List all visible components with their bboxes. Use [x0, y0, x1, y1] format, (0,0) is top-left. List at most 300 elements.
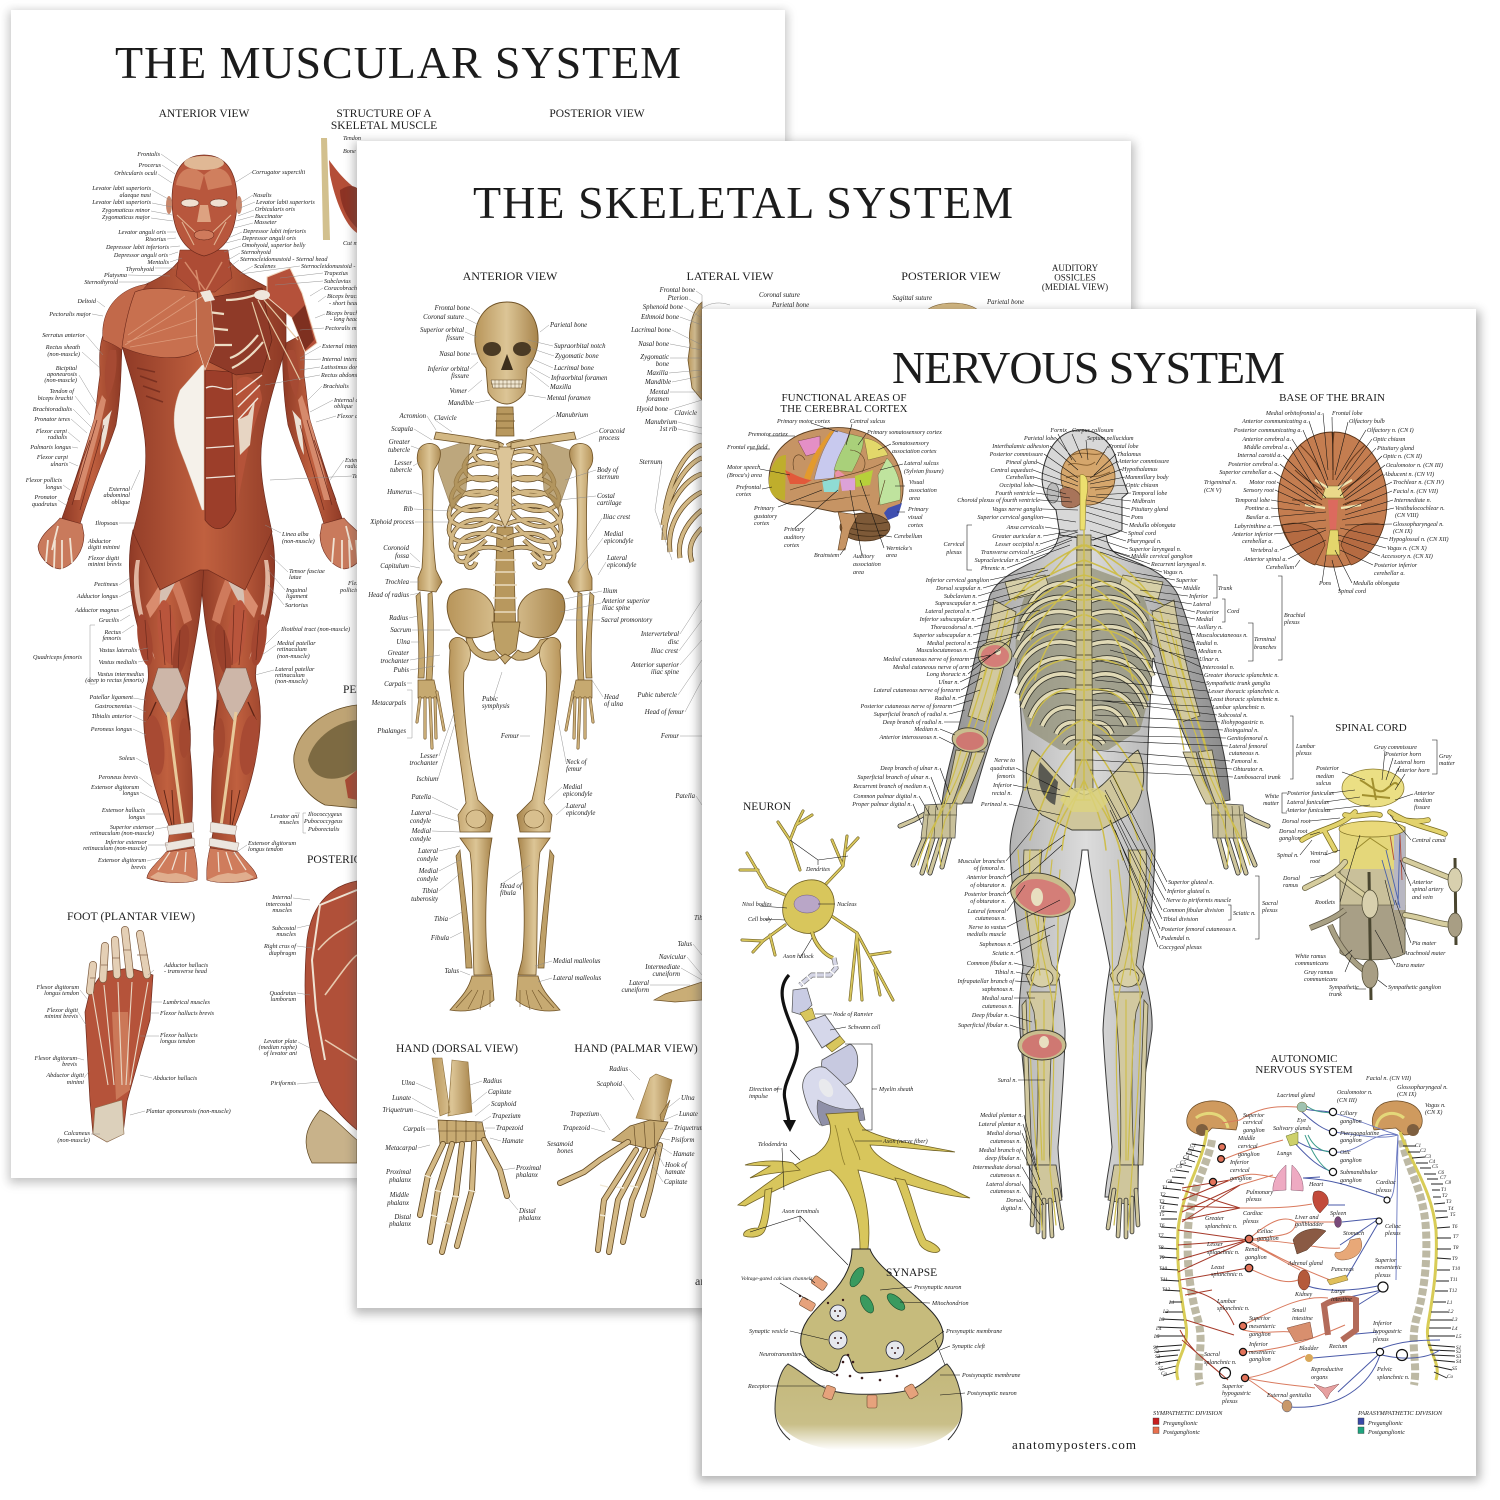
labels: autonomic: Pulmonary — [1245, 1190, 1273, 1196]
organ: pancreas — [1327, 1275, 1348, 1285]
heading: hand dorsal: HAND (DORSAL VIEW) — [396, 1043, 518, 1055]
labels: nervous body right: Inferior — [1188, 593, 1209, 600]
labels: nervous body right: plexus — [1283, 620, 1300, 626]
labels: muscular right: Flexor hallucis brevis — [159, 1010, 215, 1017]
labels: muscular right: Masseter — [253, 219, 277, 226]
leader lines: nervous body — [913, 434, 1233, 1225]
labels: brain diagrams: Internal carotid a. — [1236, 453, 1282, 459]
labels: brain diagrams: Trochlear n. (CN IV) — [1393, 479, 1444, 486]
labels: spinal cord: spinal artery — [1412, 887, 1444, 893]
labels: autonomic: Facial n. (CN VII) — [1365, 1075, 1411, 1082]
labels: skeletal: Radius — [388, 615, 408, 622]
labels: skeletal: cuneiform — [652, 971, 680, 978]
labels: nervous body left: Hypothalamus — [1121, 467, 1158, 473]
labels: skeletal: Lesser — [393, 460, 412, 467]
spine level labels: C7 — [1170, 1168, 1176, 1174]
labels: skeletal: Head of femur — [644, 709, 684, 716]
labels: brain diagrams: Spinal cord — [1338, 589, 1367, 595]
labels: muscular left: Extensor digitorum — [90, 784, 140, 791]
labels: neuron: Receptor — [747, 1384, 771, 1390]
labels: skeletal: Costal — [597, 493, 615, 500]
labels: skeletal: condyle — [417, 856, 438, 863]
labels: muscular left: muscles — [279, 819, 300, 826]
labels: nervous body left: Infrapatellar branch of — [956, 978, 1015, 985]
curved arrow: direction of impulse — [782, 975, 797, 1132]
labels: autonomic: Bladder — [1299, 1346, 1319, 1352]
labels: spinal cord: Posterior horn — [1384, 752, 1421, 758]
labels: skeletal: Lacrimal bone — [553, 365, 594, 372]
labels: autonomic: splanchnic n. — [1205, 1224, 1238, 1230]
labels: autonomic: mesenteric — [1249, 1324, 1276, 1330]
labels: skeletal: Medial malleolus — [552, 958, 601, 965]
labels: muscular left: Flexor carpi — [36, 454, 68, 461]
labels: nervous body left: Superficial branch of ulnar n. — [857, 774, 930, 781]
labels: skeletal: Humerus — [386, 489, 412, 496]
labels: skeletal: Rib — [403, 506, 414, 513]
labels: spinal cord: Anterior funiculus — [1285, 807, 1331, 814]
labels: autonomic: Superior — [1243, 1113, 1265, 1119]
spine level labels: T2 — [1160, 1192, 1166, 1198]
labels: brain diagrams: Pituitary gland — [1376, 446, 1415, 452]
labels: autonomic: ganglion — [1249, 1332, 1271, 1338]
website: skeletal clipped: anatomyposters.com — [695, 1274, 795, 1288]
labels: muscular left: Soleus — [119, 755, 136, 762]
brackets: nervous — [967, 525, 1293, 939]
spine level labels: T12 — [1162, 1287, 1170, 1293]
labels: skeletal: epicondyle — [607, 562, 636, 569]
labels: nervous body left — [851, 428, 1176, 1212]
illustration: posterior abdominal wall — [305, 881, 357, 1163]
labels: muscular right: Linea alba — [281, 531, 309, 538]
labels: neuron: Direction of — [748, 1086, 780, 1093]
labels: nervous body left: Temporal lobe — [1132, 491, 1167, 497]
labels: nervous body left: Thalamus — [1117, 452, 1142, 458]
labels: spinal cord: Lateral horn — [1393, 760, 1425, 766]
labels: brain diagrams: (Broca's) area — [727, 472, 762, 479]
labels: muscular left: Subcostal — [272, 925, 296, 932]
labels: brain diagrams: Primary motor cortex — [776, 419, 830, 425]
sternum — [495, 447, 515, 528]
labels: nervous body left: Superficial branch of radial n. — [874, 711, 948, 718]
labels: nervous body left: Fornix — [1049, 428, 1067, 434]
labels: skeletal: of ulna — [604, 701, 624, 708]
labels: skeletal: Carpals — [403, 1126, 425, 1133]
labels: brain diagrams: cortex — [908, 523, 924, 529]
right arm bones — [566, 443, 594, 748]
labels: muscular right: oblique — [334, 403, 353, 410]
labels: skeletal: bone — [656, 361, 669, 368]
labels: nervous body right: plexus — [1261, 908, 1278, 914]
spine level labels: C7 — [1440, 1175, 1446, 1181]
labels: nervous body right: Lumbar splanchnic n. — [1211, 705, 1265, 711]
labels: muscular right: Depressor labii inferioris — [242, 228, 307, 235]
labels: skeletal: Pterion — [667, 295, 689, 302]
labels: muscular right: Scalenes — [254, 263, 276, 270]
labels: skeletal: fissure — [446, 335, 464, 342]
labels: autonomic: Cardiac — [1243, 1211, 1263, 1217]
spine level labels: S1 — [1153, 1345, 1159, 1351]
labels: autonomic: Lesser — [1206, 1242, 1224, 1248]
spine level labels: T6 — [1452, 1224, 1458, 1230]
labels: autonomic: splanchnic n. — [1217, 1306, 1250, 1312]
heading: auditory ossicles: AUDITORY — [1052, 263, 1098, 273]
labels: skeletal: Lateral — [417, 848, 438, 855]
labels: nervous body right: Ilioinguinal n. — [1223, 728, 1259, 734]
labels: nervous body left: cutaneous n. — [982, 1004, 1013, 1010]
labels: autonomic: Pancreas — [1330, 1267, 1354, 1273]
labels: autonomic: Submandibular — [1340, 1170, 1378, 1176]
labels: muscular right: Sartorius — [285, 602, 309, 609]
labels: muscular right: (non-muscle) — [277, 653, 310, 660]
labels: muscular left: intercostal — [266, 901, 292, 908]
labels: muscular right: Biceps brachii — [326, 310, 362, 317]
labels: skeletal: Lunate — [391, 1095, 411, 1102]
labels: nervous body left: Nerve to vastus — [967, 925, 1007, 931]
labels: neuron: impulse — [749, 1094, 768, 1100]
labels: skeletal: Ulna — [396, 639, 411, 646]
ear — [1047, 483, 1059, 503]
labels: skeletal: Parietal bone — [549, 322, 587, 329]
labels: nervous body left: Inferior subscapular n. — [919, 616, 976, 623]
labels: brain diagrams: Oculomotor n. (CN III) — [1386, 462, 1443, 469]
labels: skeletal: Vomer — [450, 388, 467, 395]
labels: skeletal: symphysis — [482, 703, 510, 710]
left arm bones — [416, 443, 444, 748]
labels: skeletal: Head — [603, 694, 619, 701]
labels: spinal cord: Central canal — [1412, 838, 1446, 844]
labels: muscular right: Tensor fasciae — [289, 568, 325, 575]
labels: skeletal: Coronoid — [383, 545, 410, 552]
organ: kidney — [1298, 1270, 1310, 1290]
labels: brain diagrams: Wernicke's — [886, 546, 913, 552]
labels: skeletal: Ischium — [415, 776, 438, 783]
labels: brain diagrams: Posterior cerebral a. — [1227, 462, 1279, 468]
illustration: functional areas brain — [769, 428, 903, 550]
legend: parasympathetic division: Postganglionic — [1367, 1430, 1405, 1436]
labels: nervous body left: Septum pellucidum — [1087, 436, 1134, 442]
labels: skeletal: Navicular — [658, 954, 686, 961]
labels: skeletal: femur — [566, 766, 582, 773]
labels: nervous body right: Posterior femoral cutaneous n. — [1160, 926, 1237, 933]
labels: skeletal: Mental — [649, 389, 669, 396]
organ: reproductive — [1314, 1384, 1339, 1399]
labels: nervous body left: Medial pectoral n. — [926, 641, 972, 647]
labels: autonomic: cervical — [1243, 1120, 1263, 1126]
labels: skeletal: Medial — [603, 531, 623, 538]
labels: autonomic: Superior — [1249, 1316, 1271, 1322]
labels: muscular left: Risorius — [144, 236, 167, 243]
website: anatomyposters.com: anatomyposters.com — [1012, 1437, 1136, 1452]
labels: nervous body right: Coccygeal plexus — [1159, 945, 1202, 951]
labels: nervous body right: Obturator n. — [1233, 767, 1264, 773]
spine level labels: S5 — [1452, 1366, 1458, 1372]
labels: nervous body left: Dorsal — [1005, 1198, 1023, 1204]
spine level labels: C3 — [1186, 1151, 1192, 1157]
labels: muscular left: Depressor anguli oris — [113, 252, 169, 259]
forearm cut section — [951, 726, 989, 754]
labels: nervous body left: cutaneous n. — [990, 1189, 1021, 1195]
labels: autonomic: splanchnic n. — [1377, 1375, 1410, 1381]
labels: brain diagrams: Labyrinthine a. — [1233, 524, 1272, 530]
labels: brain diagrams: Anterior communicating a. — [1241, 419, 1308, 425]
labels: brain diagrams: Brainstem — [814, 553, 840, 559]
labels: neuron: Presynaptic neuron — [913, 1285, 961, 1291]
labels: skeletal: cuneiform — [621, 987, 649, 994]
labels: nervous body left: of femoral n. — [974, 865, 1005, 872]
labels: nervous body left: Sural n. — [998, 1078, 1017, 1084]
heading: synapse: SYNAPSE — [886, 1267, 937, 1279]
labels: brain diagrams: cerebellar a. — [1242, 539, 1273, 545]
labels: muscular left: Gracilis — [99, 617, 120, 624]
labels: skeletal: Lateral — [565, 803, 586, 810]
labels: skeletal: Iliac crest — [650, 648, 679, 655]
labels: muscular left: Deltoid — [76, 298, 97, 305]
leader lines: skeletal — [407, 291, 702, 1210]
legend: parasympathetic division — [1357, 1410, 1443, 1436]
labels: muscular right: Plantar aponeurosis (non-muscle) — [145, 1108, 231, 1115]
labels: skeletal: Iliac crest — [602, 514, 631, 521]
labels: autonomic: Sacral — [1204, 1352, 1220, 1358]
labels: nervous body left: of obturator n. — [970, 882, 1006, 889]
heading: posterior view: POSTERIOR VIEW — [549, 108, 645, 120]
labels: skeletal: disc — [668, 639, 679, 646]
labels: brain diagrams: Central sulcus — [850, 419, 886, 425]
labels: muscular left: Iliopsoas — [94, 520, 119, 527]
labels: muscular left: biceps brachii — [38, 395, 73, 402]
labels: brain diagrams: Premotor cortex — [747, 432, 788, 438]
labels: muscular left: Flexor digitorum — [34, 1055, 78, 1062]
labels: muscular left: Levator labii superioris — [91, 199, 152, 206]
labels: skeletal: cartilage — [597, 500, 622, 507]
spine level labels: L1 — [1446, 1300, 1453, 1306]
labels: muscular left: Palmaris longus — [29, 444, 72, 451]
labels: skeletal: condyle — [410, 818, 431, 825]
illustration: autonomic spines — [1155, 1101, 1455, 1385]
labels: muscular left: External — [108, 486, 130, 493]
labels: skeletal: Supraorbital notch — [554, 343, 606, 350]
labels: skeletal: Carpals — [384, 681, 406, 688]
labels: muscular right: Extensor digitorum — [247, 840, 296, 847]
labels: muscular right: Tendon of — [352, 473, 378, 480]
labels: nervous body left: Pineal gland — [1005, 460, 1038, 466]
spine level labels: L1 — [1168, 1300, 1175, 1306]
labels: nervous body left: Medial plantar n. — [979, 1113, 1023, 1119]
upper arm cut section — [978, 641, 1012, 669]
labels: nervous body right: branches — [1254, 645, 1277, 651]
labels: autonomic: plexus — [1242, 1219, 1259, 1225]
labels: nervous body left: Pons — [1130, 515, 1144, 521]
labels: autonomic: plexus — [1372, 1337, 1389, 1343]
labels: skeletal: Fibula — [430, 935, 450, 942]
spine level labels: C2 — [1420, 1148, 1426, 1154]
organ: bladder — [1305, 1354, 1313, 1362]
labels: brain diagrams: Pontine a. — [1244, 506, 1270, 512]
labels: brain diagrams: cortex — [736, 492, 752, 498]
labels: nervous body left: Inferior — [992, 782, 1013, 789]
labels: muscular left: Pectineus — [93, 581, 119, 588]
labels: skeletal: Patella — [410, 794, 432, 801]
labels: spinal cord: Rootlets — [1314, 900, 1336, 906]
labels: skeletal: Manubrium — [555, 412, 588, 419]
labels: neuron: Dendrites — [805, 867, 831, 873]
labels: skeletal — [367, 287, 1024, 1228]
labels: muscular left: abdominal — [104, 492, 130, 499]
organ: eye — [1297, 1102, 1307, 1112]
spine level labels: T8 — [1453, 1245, 1459, 1251]
labels: nervous body right: Lateral femoral — [1228, 743, 1268, 750]
labels: muscular right: Biceps brachii — [327, 293, 363, 300]
labels: skeletal: fibula — [500, 890, 516, 897]
right leg — [1108, 850, 1152, 1237]
labels: muscular right: longus tendon — [160, 1038, 195, 1045]
illustration: hand palmar view — [560, 1074, 672, 1252]
left leg bones — [449, 637, 494, 1011]
panel: muscular system poster — [9, 10, 787, 1183]
labels: nervous body left: of obturator n. — [970, 898, 1006, 905]
organ: stomach — [1335, 1238, 1362, 1260]
labels: autonomic: cervical — [1230, 1168, 1250, 1174]
spine level labels: C3 — [1425, 1154, 1431, 1160]
labels: autonomic: plexus — [1375, 1188, 1392, 1194]
heading: hand palmar: HAND (PALMAR VIEW) — [574, 1043, 698, 1055]
labels: brain diagrams: Temporal lobe — [1235, 498, 1270, 504]
labels: autonomic: splanchnic n. — [1211, 1272, 1244, 1278]
panel: nervous system poster — [698, 309, 1480, 1481]
spine level labels: T3 — [1159, 1199, 1165, 1205]
labels: neuron: Schwann cell — [848, 1025, 881, 1031]
labels: skeletal: epicondyle — [604, 538, 633, 545]
labels: muscular right: Buccinator — [255, 213, 283, 220]
labels: spinal cord: ganglion — [1279, 836, 1301, 842]
labels: nervous body left: Common palmar digital n. — [853, 794, 918, 800]
legend: sympathetic division: SYMPATHETIC DIVISION — [1153, 1410, 1223, 1417]
heading: functional areas: FUNCTIONAL AREAS OF — [782, 392, 906, 404]
spine level labels: S3 — [1155, 1354, 1161, 1360]
heading: pelvis clipped: PELVIC — [343, 684, 383, 696]
spine level labels: T5 — [1159, 1212, 1165, 1218]
labels: nervous body left: Greater auricular n. — [992, 534, 1042, 540]
heading: anterior view: ANTERIOR VIEW — [463, 269, 558, 283]
labels: muscular right: External intercostal — [321, 343, 371, 350]
illustration: lateral skeleton partial — [654, 295, 980, 1002]
labels: brain diagrams: cortex — [784, 543, 800, 549]
labels: muscular left: Zygomaticus minor — [102, 207, 151, 214]
labels: skeletal: trochanter — [381, 658, 409, 665]
labels: nervous body left: Phrenic n. — [980, 566, 1006, 572]
labels: skeletal: Lesser — [419, 753, 438, 760]
right leg bones — [516, 637, 561, 1011]
labels: spinal cord — [1263, 745, 1456, 998]
illustration: hand dorsal view — [420, 1058, 507, 1252]
labels: nervous body right — [1126, 539, 1316, 951]
labels: nervous body left: Transverse cervical n. — [981, 550, 1035, 556]
labels: skeletal: Radius — [608, 1066, 628, 1073]
title: skeletal: THE SKELETAL SYSTEM — [473, 177, 1013, 228]
labels: skeletal: Maxilla — [646, 370, 669, 377]
labels: muscular left: Rectus — [104, 629, 122, 636]
labels: muscular left: quadratus — [32, 501, 58, 508]
labels: muscular left: Pronator teres — [33, 416, 71, 423]
illustration: axon terminals — [738, 1112, 970, 1252]
labels: skeletal: Ulna — [401, 1080, 416, 1087]
head — [172, 155, 237, 256]
labels: skeletal: Neck of — [565, 759, 588, 766]
labels: skeletal: Radius — [482, 1078, 502, 1085]
labels: nervous body left: Medulla oblongata — [1128, 523, 1176, 529]
spine level labels: S2 — [1456, 1349, 1462, 1355]
heading: posterior view: POSTERIOR VIEW — [901, 269, 1001, 283]
reflected pectoral flap — [267, 268, 317, 352]
labels: brain diagrams: Vestibulocochlear n. — [1395, 506, 1445, 512]
labels: skeletal: phalanx — [388, 1177, 411, 1184]
labels: spinal cord: Pia mater — [1411, 941, 1437, 947]
labels: muscular left: Flexor pollicis — [25, 477, 63, 484]
labels: brain diagrams: Abducent n. (CN VI) — [1383, 471, 1434, 478]
labels: muscular right: Subclavius — [324, 278, 351, 285]
labels: skeletal: Talus — [678, 941, 692, 948]
labels: nervous body right: Lesser thoracic splanchnic n. — [1207, 689, 1280, 695]
organ: heart — [1313, 1191, 1328, 1213]
labels: muscular left: Abductor digiti — [45, 1072, 84, 1079]
labels: autonomic: ganglion — [1340, 1119, 1362, 1125]
labels: brain diagrams: Somatosensory — [892, 441, 929, 447]
labels: skeletal: Inferior orbital — [427, 366, 469, 373]
legend: sympathetic division: Preganglionic — [1162, 1421, 1198, 1427]
labels: muscular left: Adductor longus — [76, 593, 119, 600]
labels: muscular right: latae — [289, 574, 302, 581]
labels: skeletal: Phalanges — [376, 728, 406, 735]
labels: brain diagrams: Medial orbitofrontal a. — [1265, 410, 1322, 417]
labels: nervous body left: Thoracodorsal n. — [931, 625, 973, 631]
labels: muscular left: aponeurosis — [47, 371, 78, 378]
labels: muscular right: Omohyoid, superior belly — [242, 242, 306, 249]
labels: muscular right: retinaculum — [277, 646, 307, 653]
labels: autonomic: Spleen — [1330, 1211, 1346, 1217]
scapulas — [438, 440, 470, 510]
labels: muscular left: Serratus anterior — [42, 332, 86, 339]
labels: autonomic: Oculomotor n. — [1337, 1090, 1373, 1096]
labels: brain diagrams: association cortex — [892, 449, 937, 455]
labels: skeletal: Scaphoid — [597, 1081, 623, 1088]
heading: auditory ossicles: OSSICLES — [1054, 272, 1096, 282]
labels: muscular right: Pubococcygeus — [303, 818, 343, 825]
organ: spleen — [1334, 1216, 1342, 1228]
labels: nervous body left: Medial dorsal — [986, 1131, 1021, 1137]
labels: muscular right: Abductor — [87, 538, 112, 545]
labels: nervous body left: Radial n. — [934, 696, 957, 702]
labels: autonomic: Lacrimal gland — [1276, 1093, 1316, 1099]
labels: neuron: Axon terminals — [781, 1209, 820, 1215]
labels: nervous body right: Intercostal n. — [1201, 665, 1234, 671]
labels: brain diagrams: Olfactory bulb — [1349, 418, 1385, 425]
labels: neuron: Synaptic cleft — [952, 1343, 985, 1350]
spine — [1075, 535, 1093, 790]
labels: skeletal: Trapezoid — [563, 1125, 591, 1132]
spine level labels: L5 — [1455, 1334, 1462, 1340]
labels: autonomic: gallbladder — [1295, 1222, 1324, 1228]
labels: nervous body left: Cerebellum — [1006, 475, 1035, 481]
labels: nervous body left: plexus — [945, 550, 962, 556]
autonomic sympathetic lines — [1178, 1180, 1248, 1380]
labels: muscular left: muscles — [276, 931, 297, 938]
labels: skeletal: Hook of — [664, 1162, 688, 1169]
labels: skeletal: Scaphoid — [491, 1101, 517, 1108]
labels: muscular left: Calcaneus — [64, 1130, 91, 1137]
labels: nervous body left: Posterior branch — [963, 892, 1006, 898]
labels: neuron: Axon (nerve fiber) — [882, 1138, 928, 1145]
labels: muscular right: Corrugator supercilii — [252, 169, 306, 176]
labels: muscular right: Iliococcygeus — [307, 811, 343, 818]
